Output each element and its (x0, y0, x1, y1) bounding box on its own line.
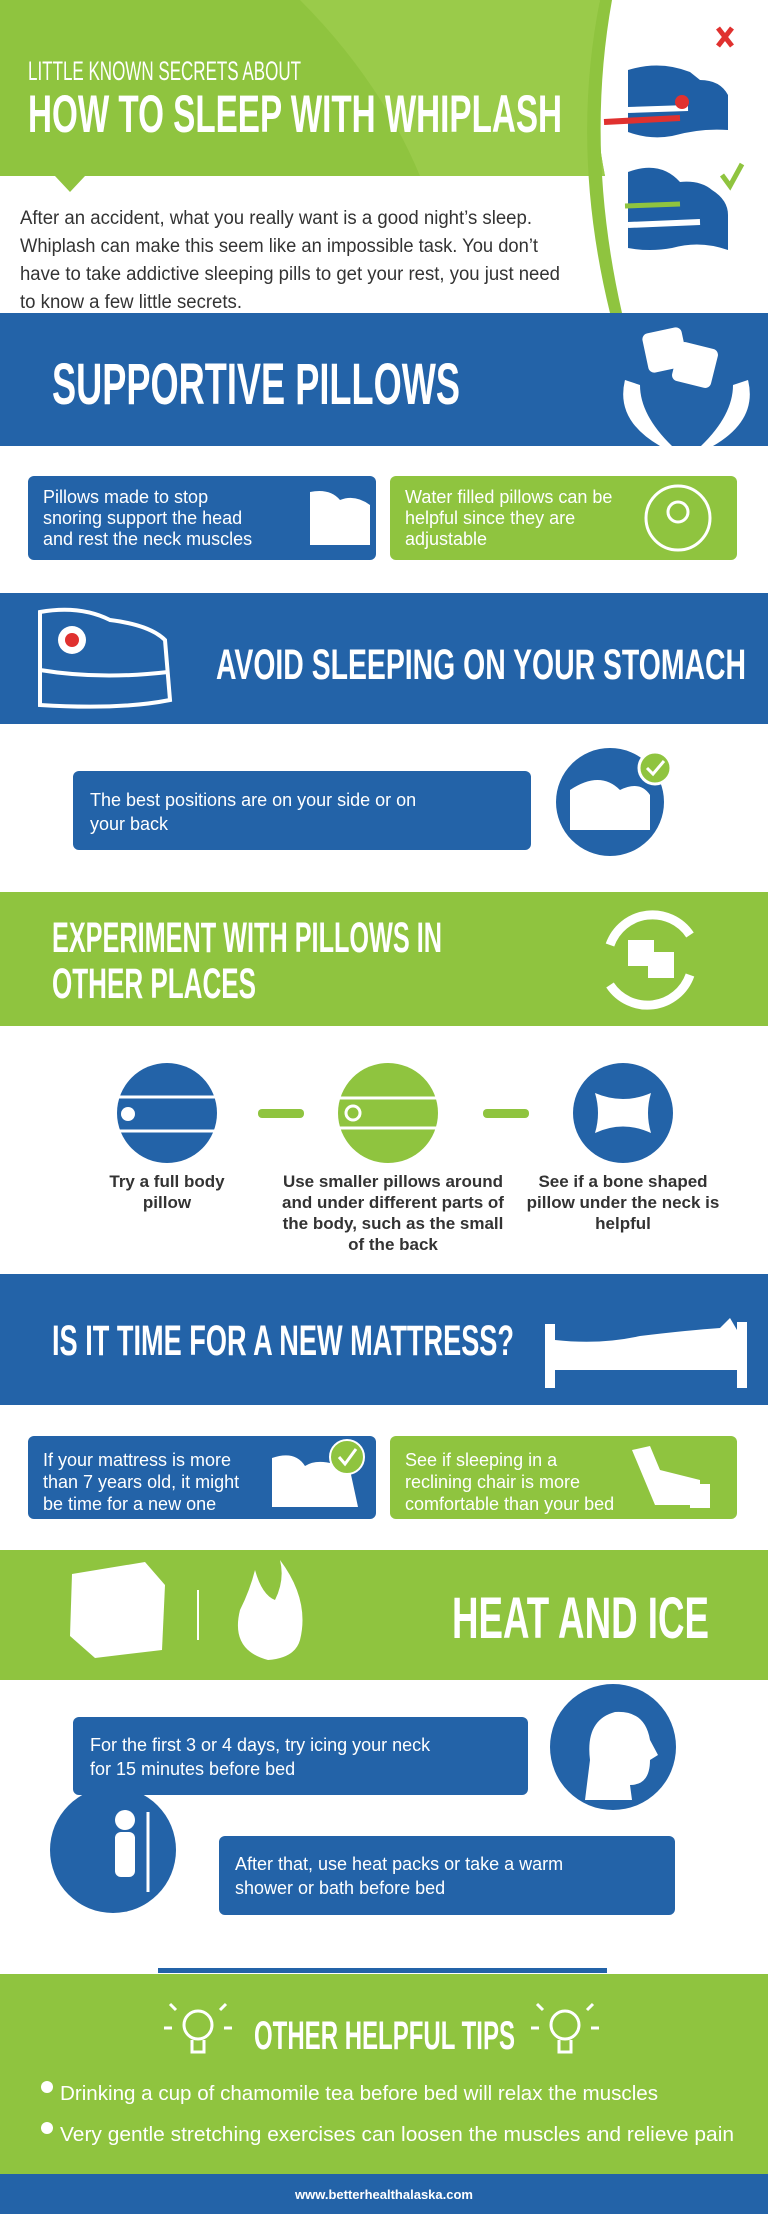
intro text: After an accident, what you really want is a good night’s sleep. (20, 208, 532, 229)
icon: flame (238, 1560, 302, 1660)
box: reclining chair: comfortable than your bed (405, 1494, 614, 1514)
band: supportive pillows: SUPPORTIVE PILLOWS (52, 352, 460, 417)
box: pillows to stop snoring: snoring support the head (43, 508, 242, 528)
box: heat packs: shower or bath before bed (235, 1878, 445, 1898)
band: heat and ice (0, 1550, 768, 1680)
box: pillows to stop snoring: Pillows made to stop (43, 487, 208, 507)
step: smaller pillows: and under different parts of (282, 1193, 504, 1212)
box: water filled pillows: helpful since they are (405, 508, 575, 528)
icon: shower (50, 1787, 176, 1913)
header panel: have to take addictive sleeping pills to get your rest, you just need (20, 264, 560, 285)
icon: bad sleeping posture (604, 28, 732, 137)
step: smaller pillows: Use smaller pillows around (283, 1172, 503, 1191)
box: mattress age: than 7 years old, it might (43, 1472, 239, 1492)
box: best positions (73, 771, 531, 850)
step: smaller pillows: of the back (348, 1235, 438, 1254)
panel: other helpful tips: OTHER HELPFUL TIPS (254, 2014, 515, 2058)
box: reclining chair: See if sleeping in a (405, 1450, 558, 1470)
icon: hands with pillows (623, 326, 750, 446)
step: smaller pillows (282, 1063, 504, 1254)
box: icing: for 15 minutes before bed (90, 1759, 295, 1779)
subtitle: LITTLE KNOWN SECRETS ABOUT (28, 56, 301, 86)
box: heat packs: After that, use heat packs or take a warm (235, 1854, 563, 1874)
box: water filled pillows: adjustable (405, 529, 487, 549)
band: new mattress: IS IT TIME FOR A NEW MATTRESS? (52, 1317, 514, 1365)
step: bone shaped pillow (527, 1063, 719, 1233)
box: reclining chair: reclining chair is more (405, 1472, 580, 1492)
step: full body pillow: pillow (143, 1193, 192, 1212)
icon: ice cube (70, 1562, 165, 1658)
box: pillows to stop snoring (28, 476, 376, 560)
band: supportive pillows (0, 313, 768, 446)
step: full body pillow: Try a full body (109, 1172, 225, 1191)
bullet list: Drinking a cup of chamomile tea before bed will relax the muscles (60, 2083, 658, 2105)
step: bone shaped pillow: See if a bone shaped (538, 1172, 708, 1191)
icon: bulb right (531, 2004, 599, 2052)
box: icing: For the first 3 or 4 days, try icing your neck (90, 1735, 431, 1755)
band: experiment with pillows: EXPERIMENT WITH PILLOWS IN (52, 914, 442, 962)
header panel: Whiplash can make this seem like an impossible task. You don’t (20, 236, 539, 257)
footer (0, 2174, 768, 2214)
step: full body pillow (109, 1063, 225, 1212)
box: best positions: The best positions are on your side or on (90, 790, 416, 810)
icon: side sleeping check (556, 748, 671, 856)
step: smaller pillows: the body, such as the small (283, 1214, 503, 1233)
panel: other helpful tips (0, 1974, 768, 2174)
icon: cycling pillows (610, 915, 690, 1005)
box: water filled pillows (390, 476, 737, 560)
band: experiment with pillows (0, 892, 768, 1026)
header panel (0, 0, 768, 313)
band: new mattress (0, 1274, 768, 1405)
bullet list: Very gentle stretching exercises can loosen the muscles and relieve pain (60, 2124, 734, 2146)
header panel: to know a few little secrets. (20, 292, 242, 313)
connector dash (258, 1109, 304, 1118)
icon: stomach sleeper (40, 610, 170, 707)
footer: www.betterhealthalaska.com (294, 2187, 473, 2202)
box: best positions: your back (90, 814, 169, 834)
icon: good sleeping posture (625, 164, 742, 250)
icon: head (550, 1684, 676, 1810)
icon: bed (545, 1318, 747, 1388)
box: mattress age: If your mattress is more (43, 1450, 231, 1470)
step: bone shaped pillow: helpful (595, 1214, 651, 1233)
step: bone shaped pillow: pillow under the neck is (527, 1193, 719, 1212)
band: experiment with pillows: OTHER PLACES (52, 960, 256, 1008)
box: icing (73, 1717, 528, 1795)
box: heat packs (219, 1836, 675, 1915)
icon: bulb left (164, 2004, 232, 2052)
box: mattress age (28, 1436, 376, 1519)
connector dash (483, 1109, 529, 1118)
box: reclining chair (390, 1436, 737, 1519)
band: avoid sleeping on stomach (0, 593, 768, 724)
bullet list (41, 2081, 734, 2146)
box: pillows to stop snoring: and rest the neck muscles (43, 529, 252, 549)
box: mattress age: be time for a new one (43, 1494, 216, 1514)
box: water filled pillows: Water filled pillows can be (405, 487, 612, 507)
